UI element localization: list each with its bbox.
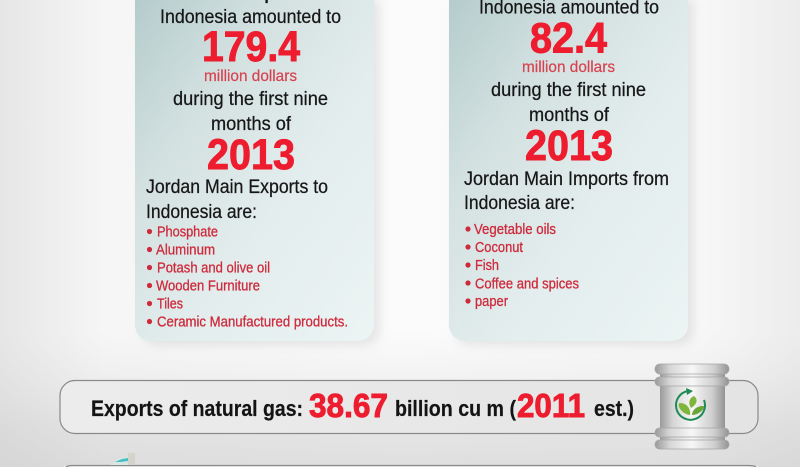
natural gas value: 38.67 bbox=[309, 387, 388, 424]
panel: Jordan exports to Indonesia bbox=[135, 0, 380, 345]
exports intro text: Indonesia amounted to bbox=[160, 6, 341, 28]
exports list: Phosphate bbox=[157, 224, 218, 240]
imports list heading: Jordan Main Imports from bbox=[464, 168, 669, 190]
imports list: Fish bbox=[475, 257, 499, 274]
exports list: Wooden Furniture bbox=[156, 278, 260, 294]
exports period: months of bbox=[211, 113, 292, 135]
imports list: paper bbox=[475, 293, 508, 310]
exports list heading: Jordan Main Exports to bbox=[146, 176, 328, 198]
natural gas estimate note: est.) bbox=[594, 396, 634, 421]
exports list: Aluminum bbox=[156, 242, 215, 258]
icon: recycling leaves bbox=[676, 388, 705, 420]
imports list: Coconut bbox=[475, 239, 524, 256]
exports list heading bbox=[146, 176, 328, 223]
imports year: 2013 bbox=[525, 122, 613, 170]
imports value: 82.4 bbox=[530, 14, 607, 62]
natural gas unit: billion cu m ( bbox=[395, 396, 517, 421]
imports list bbox=[465, 221, 579, 310]
imports list: Coffee and spices bbox=[475, 276, 579, 292]
exports value: 179.4 bbox=[202, 23, 300, 71]
natural gas year: 2011 bbox=[517, 387, 585, 424]
exports period: during the first nine bbox=[173, 88, 328, 110]
imports period bbox=[491, 79, 646, 126]
exports period bbox=[173, 88, 328, 135]
exports year: 2013 bbox=[207, 131, 295, 179]
panel: natural gas exports bbox=[60, 380, 758, 434]
panel: Jordan imports from Indonesia bbox=[449, 0, 694, 345]
exports list: Potash and olive oil bbox=[157, 260, 270, 276]
imports list heading bbox=[464, 168, 669, 214]
panel: next section (cropped) bbox=[64, 453, 758, 467]
imports period: months of bbox=[529, 104, 610, 126]
icon: gas barrel bbox=[655, 364, 729, 449]
exports unit: million dollars bbox=[204, 68, 297, 85]
exports list bbox=[147, 224, 348, 330]
imports unit: million dollars bbox=[522, 59, 615, 76]
imports list heading: Indonesia are: bbox=[464, 192, 575, 214]
natural gas label: Exports of natural gas: bbox=[91, 396, 303, 421]
exports list: Tiles bbox=[157, 296, 183, 312]
imports list: Vegetable oils bbox=[474, 221, 556, 238]
imports period: during the first nine bbox=[491, 79, 646, 101]
exports list heading: Indonesia are: bbox=[146, 201, 257, 223]
icon: cropped device bbox=[110, 453, 135, 465]
exports list: Ceramic Manufactured products. bbox=[157, 314, 348, 330]
